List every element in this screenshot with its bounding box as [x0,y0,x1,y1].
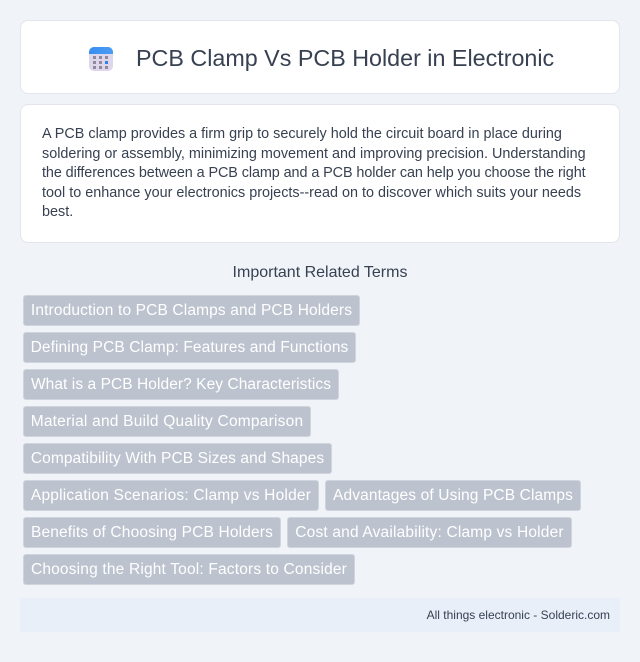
chip [325,480,581,511]
chip [23,295,360,326]
chip: Benefits of Choosing PCB Holders [31,524,273,541]
text block: intro paragraph: the differences between a PCB clamp and a PCB holder can help you choose the right [42,165,586,181]
text block: intro paragraph: best. [42,204,73,220]
icon: calendar grid [89,47,113,71]
chip: Cost and Availability: Clamp vs Holder [295,524,564,541]
chip [23,480,319,511]
chip: Advantages of Using PCB Clamps [333,487,573,504]
text block: intro paragraph [42,126,586,220]
chip: Material and Build Quality Comparison [31,413,303,430]
chip [23,443,332,474]
chip: Compatibility With PCB Sizes and Shapes [31,450,324,467]
heading: related terms: Important Related Terms [233,264,407,281]
chip: Application Scenarios: Clamp vs Holder [31,487,311,504]
chip: Defining PCB Clamp: Features and Functions [31,339,348,356]
panel: intro text [20,104,620,243]
chip: Choosing the Right Tool: Factors to Consider [31,561,347,578]
chip [23,406,311,437]
chip: Introduction to PCB Clamps and PCB Holders [31,302,352,319]
text block: intro paragraph: A PCB clamp provides a firm grip to securely hold the circuit board in place during [42,126,562,142]
panel: title card [20,20,620,94]
text block: intro paragraph: soldering or assembly, minimizing movement and improving precision. Understanding [42,146,586,162]
text block: intro paragraph: tool to enhance your electronics projects--read on to discover which suits your needs [42,185,581,201]
chip [23,517,281,548]
panel: related term chips [23,295,581,585]
chip [23,369,339,400]
chip [23,332,356,363]
footer bar [20,598,620,632]
chip [287,517,572,548]
footer text: All things electronic - Solderic.com [427,608,610,622]
chip: What is a PCB Holder? Key Characteristics [31,376,331,393]
chip [23,554,355,585]
title: PCB Clamp Vs PCB Holder in Electronic [136,45,554,71]
